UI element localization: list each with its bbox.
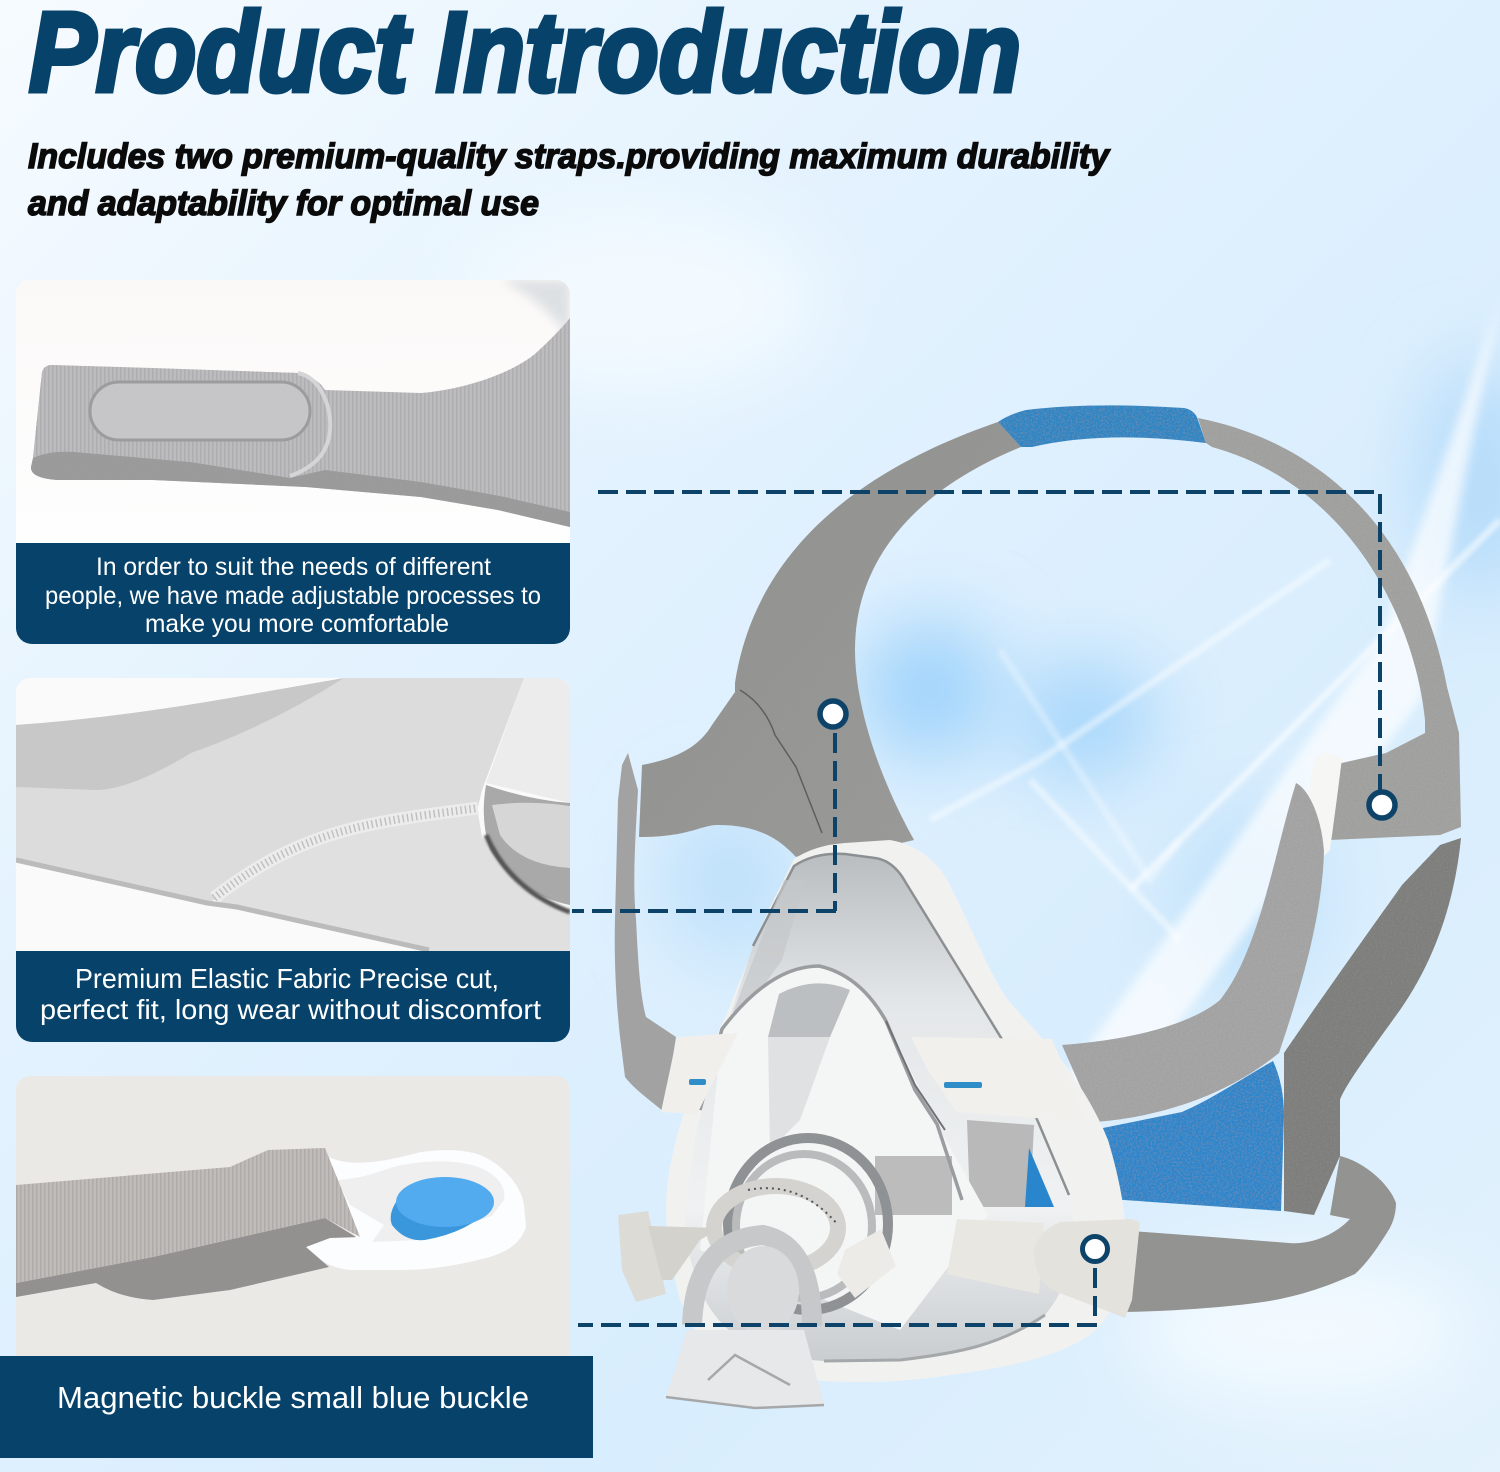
nose frame highlight bbox=[886, 1021, 945, 1130]
nose streak bbox=[768, 1037, 830, 1150]
mask shell bbox=[618, 840, 1140, 1408]
left interior shade bbox=[733, 880, 805, 1012]
caption: elastic fabric bbox=[16, 951, 570, 1042]
callout marker: buckle bbox=[1082, 1236, 1108, 1262]
caption: elastic fabric: perfect fit, long wear without discomfort bbox=[40, 994, 541, 1025]
top blue pad bbox=[998, 405, 1206, 447]
right blue mark bbox=[944, 1082, 982, 1088]
headband left bbox=[639, 422, 1021, 857]
lower buckle bbox=[1034, 1219, 1140, 1318]
panel: elastic fabric bbox=[16, 678, 570, 1042]
see-through blue bbox=[1025, 1148, 1054, 1207]
callout marker: side strap bbox=[820, 701, 846, 727]
white rim bbox=[666, 840, 1126, 1382]
lower loop strap bbox=[1115, 1156, 1396, 1312]
caption: magnetic buckle bbox=[0, 1356, 593, 1458]
photo: buckle bbox=[16, 1076, 570, 1358]
caption: adjustable: In order to suit the needs of different bbox=[96, 553, 491, 581]
buckle body bbox=[306, 1150, 526, 1270]
rear dark strap bbox=[1284, 838, 1461, 1215]
left clip bbox=[661, 1033, 738, 1114]
left port button bbox=[618, 1211, 666, 1302]
port rings bbox=[714, 1138, 888, 1310]
rear blue pad bbox=[1103, 1061, 1284, 1211]
caption: adjustable: make you more comfortable bbox=[145, 610, 449, 638]
side seam bbox=[740, 690, 822, 833]
photo: folded strap bbox=[16, 280, 570, 544]
nose frame interior bbox=[700, 966, 988, 1330]
left port arm bbox=[648, 1226, 720, 1280]
caption: magnetic buckle: Magnetic buckle small blue buckle bbox=[57, 1380, 529, 1415]
left front strap bbox=[615, 753, 676, 1112]
photo: fabric seam bbox=[16, 678, 570, 952]
subtitle line 1: Includes two premium-quality straps.providing maximum durability bbox=[28, 137, 1110, 176]
nose shade bbox=[768, 983, 850, 1037]
caption: adjustable: people, we have made adjustable processes to bbox=[45, 582, 541, 610]
see-through grey block bbox=[875, 1156, 952, 1215]
funnel edges bbox=[666, 1355, 824, 1408]
nose frame line bbox=[700, 966, 962, 1200]
right adjuster clip bbox=[1300, 752, 1342, 880]
rear padded strap bbox=[1062, 783, 1324, 1122]
panel: adjustable strap bbox=[16, 280, 570, 644]
callout line: side strap bbox=[572, 733, 836, 911]
blue magnet bbox=[391, 1177, 494, 1240]
caption: adjustable bbox=[16, 543, 570, 644]
headband right bbox=[1198, 418, 1461, 840]
elbow tube bbox=[692, 1235, 812, 1326]
rim inner line bbox=[753, 854, 1069, 1195]
mask headgear bbox=[615, 405, 1461, 1312]
right clip bbox=[911, 1037, 1087, 1122]
left blue mark bbox=[689, 1079, 706, 1085]
caption: elastic fabric: Premium Elastic Fabric Precise cut, bbox=[75, 963, 499, 994]
callout line: buckle bbox=[578, 1268, 1097, 1325]
elbow funnel bbox=[666, 1330, 824, 1408]
clear cushion bbox=[684, 854, 1073, 1361]
panel: magnetic buckle bbox=[0, 1076, 593, 1458]
callout marker: right adjuster bbox=[1369, 792, 1395, 818]
elbow inside bbox=[727, 1246, 799, 1334]
lower band bbox=[947, 1219, 1044, 1294]
callout line: top strap bbox=[598, 492, 1380, 790]
cushion bottom line bbox=[824, 1315, 1045, 1361]
lower arm to port bbox=[837, 1229, 896, 1298]
subtitle line 2: and adaptability for optimal use bbox=[28, 184, 539, 223]
see-through strap bbox=[967, 1120, 1034, 1207]
